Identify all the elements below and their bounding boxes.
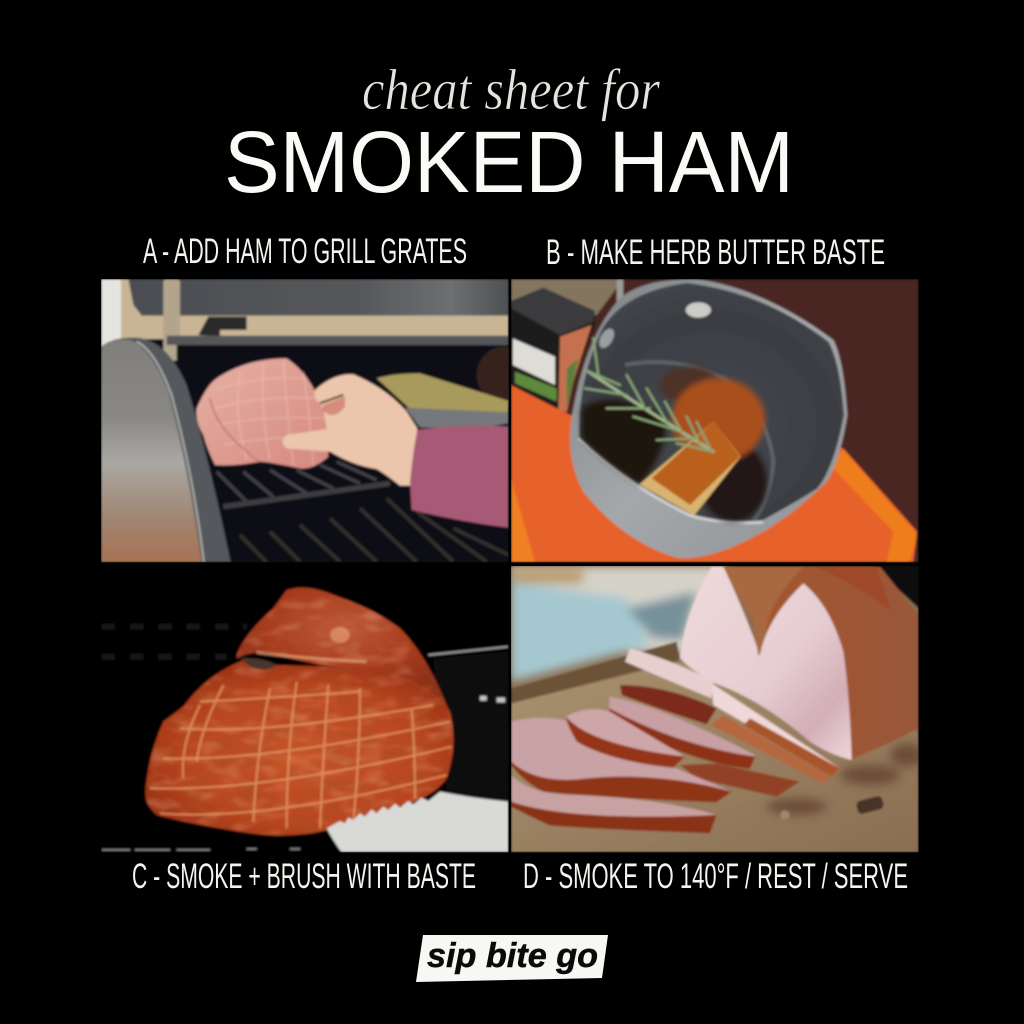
rosemary sprig	[585, 338, 713, 452]
panel A: ham placed on grill grates	[101, 279, 530, 562]
step label A: A - ADD HAM TO GRILL GRATES	[143, 232, 467, 271]
panel D: rested ham sliced on cutting board	[511, 566, 923, 852]
thin standing slices	[625, 648, 840, 783]
panel B: herb butter baste in saucepan	[511, 279, 919, 562]
saucepan	[570, 279, 847, 558]
spices	[582, 367, 767, 522]
ham top lobe	[237, 588, 447, 705]
blurred background towel	[511, 566, 724, 682]
spice tin	[511, 288, 595, 412]
sliced ham pieces	[511, 685, 755, 833]
logo: sip bite go: sip bite go	[427, 937, 598, 975]
grates	[217, 462, 509, 562]
back lower slice	[680, 763, 800, 797]
title: smoked ham: SMOKED HAM	[224, 114, 794, 211]
ham bottom lobe	[145, 658, 453, 835]
main ham	[680, 567, 919, 760]
foil tray	[377, 373, 509, 428]
hand	[282, 374, 417, 486]
tongs	[327, 792, 509, 852]
raw ham	[196, 358, 328, 469]
dark corner	[873, 566, 919, 608]
script heading: cheat sheet for: cheat sheet for	[362, 57, 660, 122]
butter pat	[639, 422, 741, 516]
step label C: C - SMOKE + BRUSH WITH BASTE	[132, 857, 476, 896]
juice pool	[767, 743, 923, 815]
panel C: smoked ham brushed with baste	[101, 566, 509, 852]
sleeve	[410, 426, 509, 528]
grill door	[101, 338, 231, 562]
